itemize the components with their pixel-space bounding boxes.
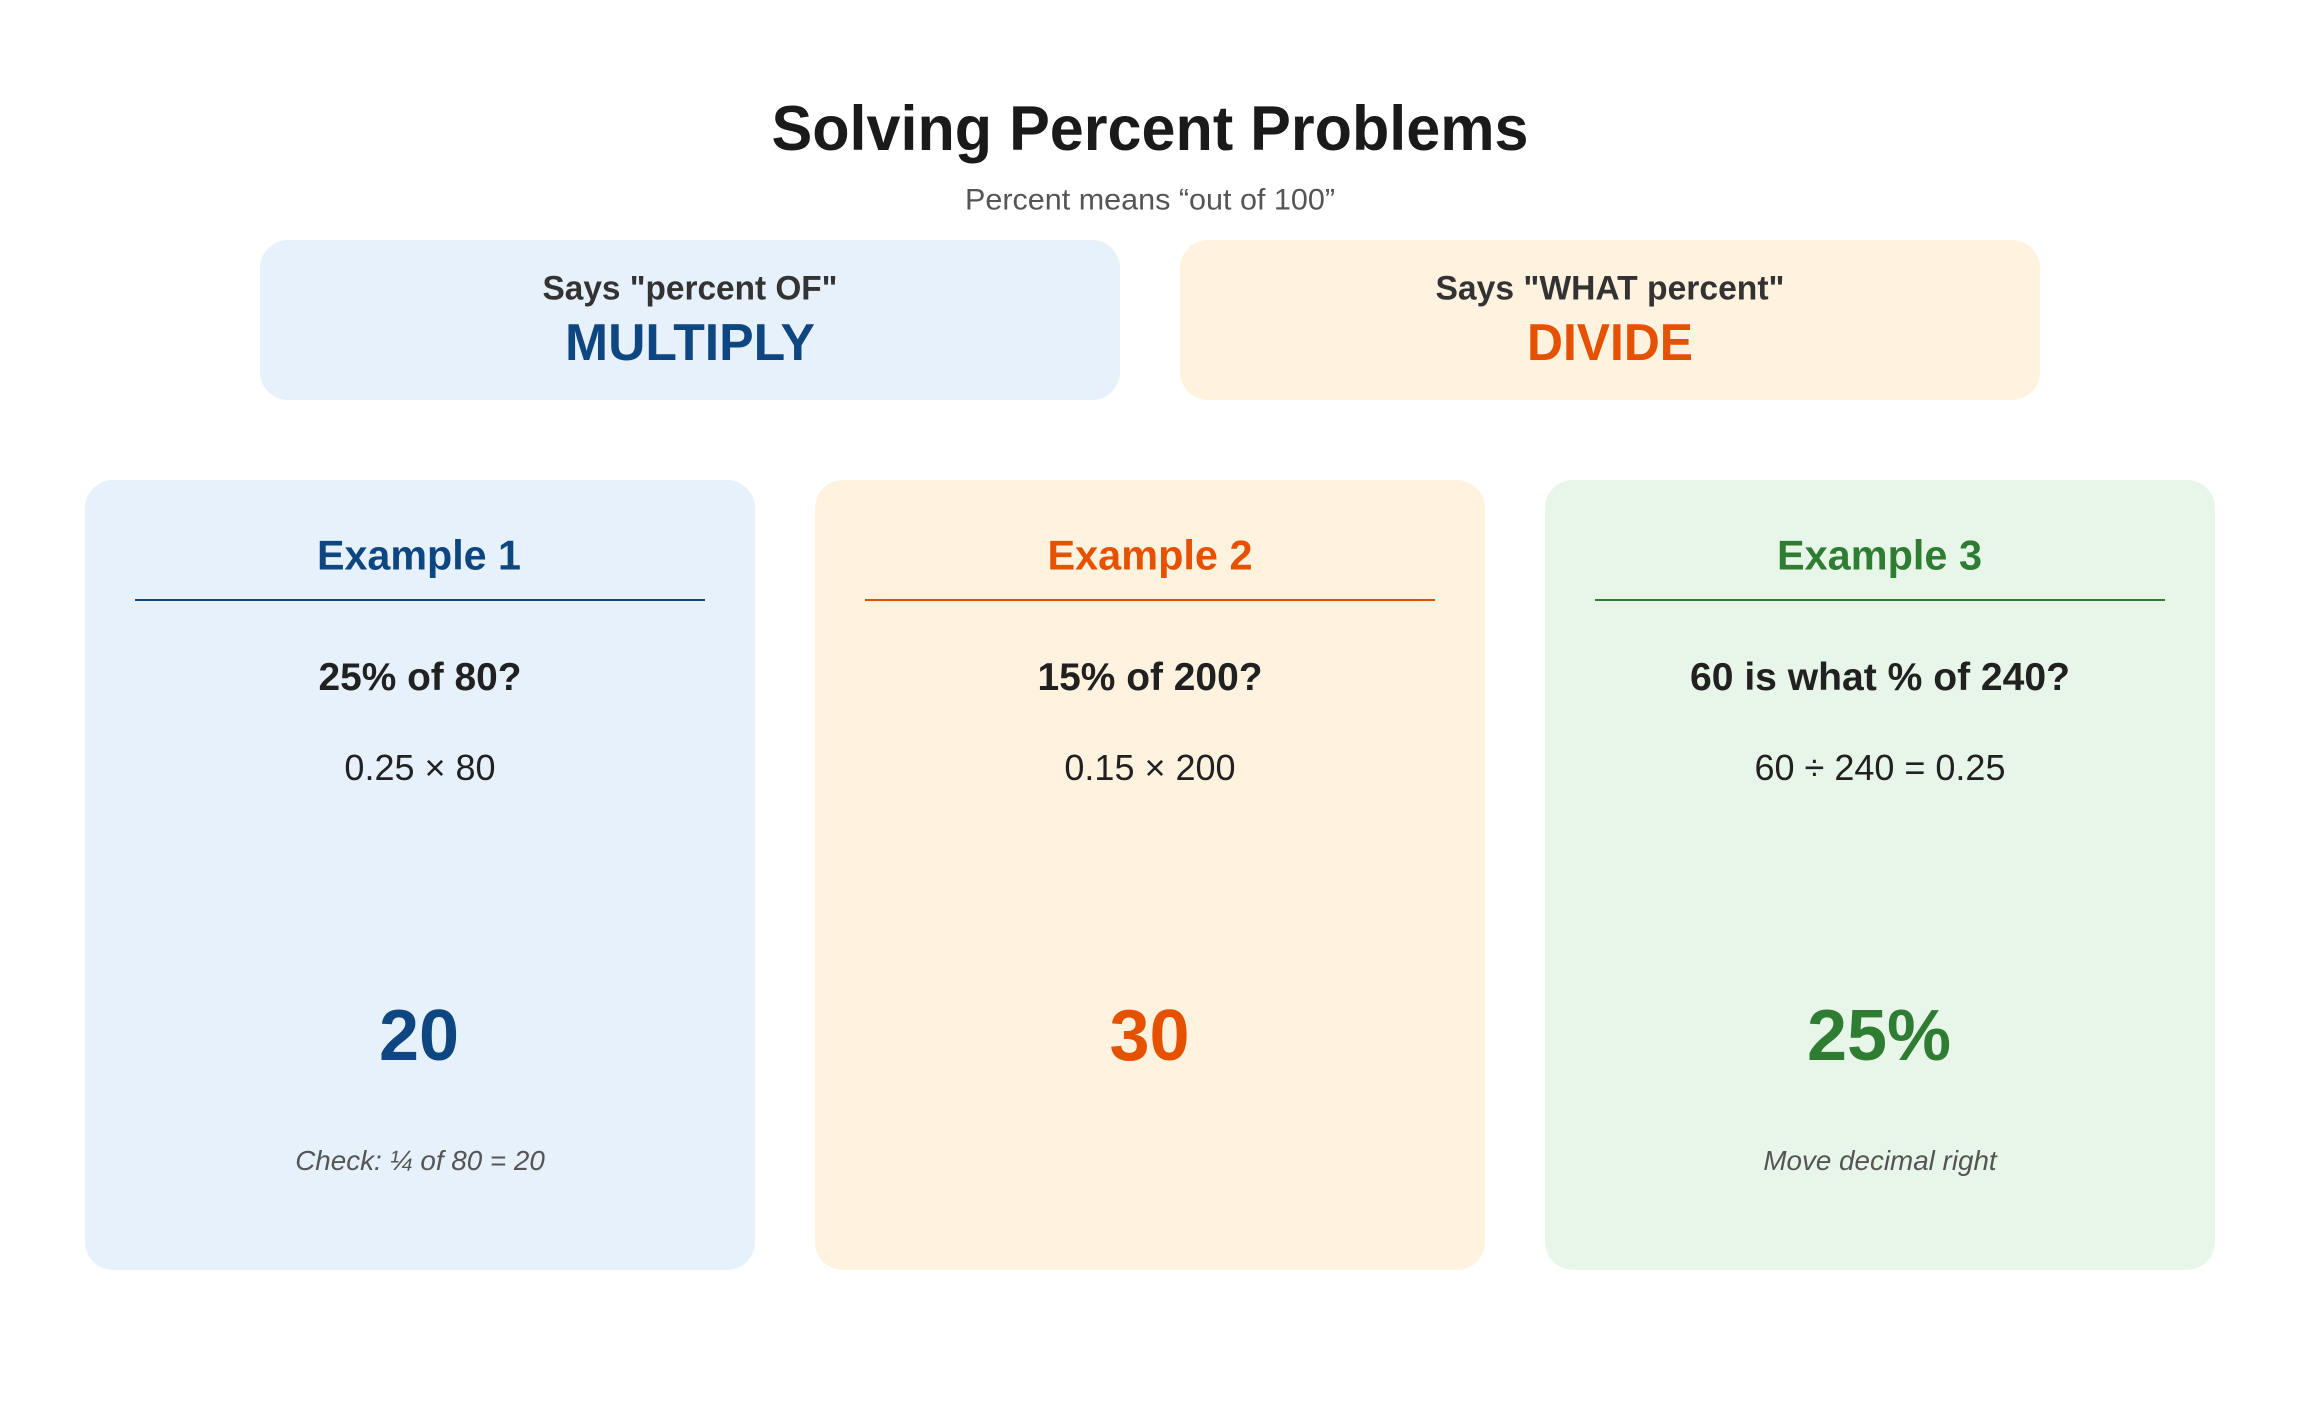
rule action: divide: DIVIDE bbox=[1527, 314, 1693, 372]
panel: divide rule bbox=[1180, 240, 2040, 400]
panel: example 1 bbox=[85, 480, 755, 1270]
example 1 note: Check: ¼ of 80 = 20 bbox=[295, 1145, 545, 1176]
example 2 question: 15% of 200? bbox=[1038, 656, 1262, 699]
example 2 answer: 30 bbox=[1109, 996, 1190, 1076]
example 1 working: 0.25 × 80 bbox=[344, 747, 496, 788]
example 2 working: 0.15 × 200 bbox=[1064, 747, 1236, 788]
title: Solving Percent Problems bbox=[772, 94, 1528, 164]
panel: example 2 bbox=[815, 480, 1485, 1270]
example 3 question: 60 is what % of 240? bbox=[1690, 656, 2070, 699]
rule action: multiply: MULTIPLY bbox=[565, 314, 815, 372]
panel: example 3 bbox=[1545, 480, 2215, 1270]
example 1 heading: Example 1 bbox=[317, 532, 521, 578]
example 1 question: 25% of 80? bbox=[318, 656, 522, 699]
rule prompt: what percent: Says "WHAT percent" bbox=[1436, 270, 1784, 308]
example 3 working: 60 ÷ 240 = 0.25 bbox=[1755, 747, 2005, 788]
example 3 note: Move decimal right bbox=[1763, 1145, 1998, 1176]
example 2 heading: Example 2 bbox=[1048, 532, 1252, 578]
subtitle: Percent means “out of 100” bbox=[965, 184, 1335, 216]
example 3 heading: Example 3 bbox=[1777, 532, 1982, 578]
rule prompt: percent of: Says "percent OF" bbox=[542, 270, 838, 308]
example 3 answer: 25% bbox=[1807, 996, 1951, 1076]
panel: multiply rule bbox=[260, 240, 1120, 400]
example 1 answer: 20 bbox=[379, 996, 459, 1076]
